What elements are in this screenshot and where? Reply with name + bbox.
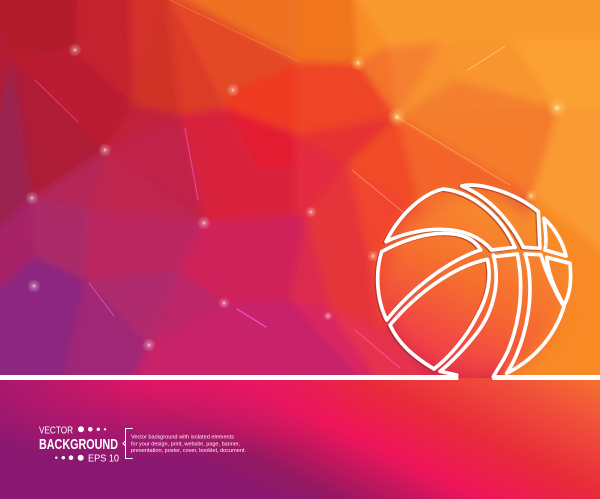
dots upper: [78, 426, 106, 432]
logo: vector background eps 10: [39, 425, 119, 464]
basketball line icon with baseline: [0, 185, 600, 380]
ball interior glow: [380, 193, 564, 377]
word: eps 10: EPS 10: [88, 453, 119, 464]
description text: presentation, poster, cover, booklet, document.: [131, 448, 246, 454]
word: vector: VECTOR: [39, 425, 73, 436]
lower band: [0, 378, 600, 499]
sparkles: [25, 43, 568, 352]
dots lower: [55, 455, 84, 461]
description text: [131, 435, 246, 454]
description text: Vector background with isolated elements: [131, 435, 234, 441]
description text: for your design, print, website, page, banner,: [131, 441, 240, 447]
ball outlines: [378, 185, 571, 377]
bracket: [123, 428, 133, 458]
light streaks: [35, 0, 510, 368]
baseline: [0, 375, 600, 380]
polygon mesh background: [0, 0, 600, 390]
word: background: BACKGROUND: [39, 436, 118, 453]
ball shadow: [376, 186, 539, 370]
